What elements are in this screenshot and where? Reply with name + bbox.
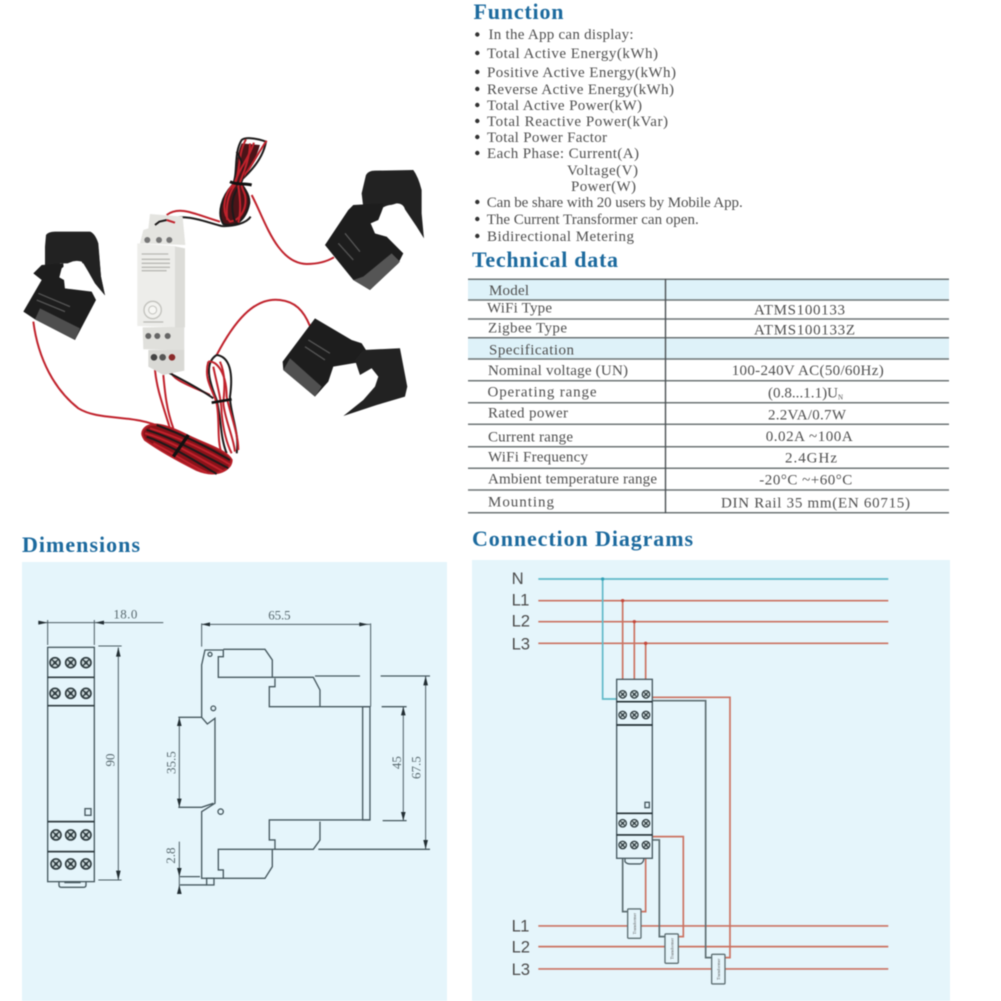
product photo: meter with three current transformers (23, 138, 424, 474)
heading: Technical data: Technical data (472, 247, 618, 272)
current transformer 1: Transformer (632, 912, 637, 934)
current transformer 2 (665, 934, 678, 963)
technical data table: Zigbee Type (488, 321, 567, 337)
technical data table: WiFi Frequency (488, 450, 588, 466)
technical data table: (0.8...1.1)U (768, 386, 838, 402)
line labels: L2 (512, 612, 530, 631)
technical data table: Ambient temperature range (488, 471, 657, 487)
dimension label: 90: 90 (102, 753, 117, 766)
function bullet list: Total Power Factor (487, 130, 607, 146)
current transformer 3 (712, 954, 725, 984)
wire: left current transformer lead (33, 322, 163, 428)
dimension label: 18.0: 18.0 (113, 607, 137, 622)
technical data table: 100-240V AC(50/60Hz) (732, 363, 884, 379)
technical data table: Operating range (488, 385, 597, 401)
current transformer 1 (628, 909, 641, 938)
panel: connection diagrams (472, 560, 950, 1001)
left current transformer (23, 232, 105, 340)
dimension label: 2.8: 2.8 (163, 848, 178, 864)
current transformer 2: Transformer (669, 937, 674, 959)
technical data table (468, 279, 949, 513)
technical data table: Model (489, 283, 529, 299)
function bullet list: Bidirectional Metering (487, 229, 634, 245)
current transformer 3: Transformer (716, 958, 721, 980)
current transformer wires (623, 697, 730, 958)
function bullet list: The Current Transformer can open. (487, 212, 699, 228)
technical data table: WiFi Type (487, 301, 552, 317)
line labels: L1 (512, 591, 529, 610)
function bullet list: Total Active Energy(kWh) (487, 46, 658, 62)
meter body (137, 214, 185, 375)
heading: Dimensions: Dimensions (22, 532, 140, 557)
technical data table: ATMS100133 (754, 302, 845, 318)
line labels: N (512, 569, 524, 588)
technical data table: 2.4GHz (785, 451, 837, 467)
function bullet list: Total Reactive Power(kVar) (487, 114, 668, 130)
technical data table: ATMS100133Z (754, 322, 855, 338)
function bullet list (475, 27, 743, 245)
side profile of module (178, 649, 430, 885)
line labels: L1 (512, 917, 529, 936)
line labels: L3 (512, 634, 530, 653)
line labels: L3 (512, 960, 530, 979)
dimension label: 65.5: 65.5 (268, 607, 291, 622)
supply wires into meter (601, 577, 647, 699)
function bullet list: Total Active Power(kW) (487, 98, 642, 114)
dimension drawings (38, 607, 430, 894)
technical data table: 0.02A ~100A (766, 429, 853, 445)
heading: Connection Diagrams: Connection Diagrams (472, 526, 693, 551)
technical data table: DIN Rail 35 mm(EN 60715) (721, 495, 910, 511)
function bullet list: Positive Active Energy(kWh) (487, 65, 676, 81)
wiring diagram (512, 569, 888, 984)
function bullet list: Voltage(V) (567, 163, 638, 179)
function bullet list: Power(W) (571, 179, 636, 195)
dimension label: 67.5: 67.5 (409, 756, 424, 779)
supply and load bus lines (538, 579, 888, 969)
technical data table: Mounting (488, 495, 554, 511)
wire bundle: top coil (160, 138, 267, 226)
technical data table: -20°C ~+60°C (759, 472, 852, 488)
function bullet list: Reverse Active Energy(kWh) (487, 82, 674, 98)
dimension label: 45: 45 (389, 756, 404, 769)
top right current transformer (325, 170, 424, 290)
dimension label: 35.5: 35.5 (164, 751, 179, 774)
wire bundle: lower coils (142, 355, 238, 474)
wire: right lower current transformer loop (217, 300, 310, 355)
technical data table: Rated power (488, 406, 568, 422)
function bullet list: Can be share with 20 users by Mobile App. (487, 195, 743, 211)
technical data table: Current range (488, 430, 573, 446)
dial (144, 301, 161, 319)
line labels (512, 569, 530, 979)
technical data table: N (838, 394, 843, 402)
function bullet list: Each Phase: Current(A) (487, 146, 639, 162)
technical data table: Specification (489, 342, 574, 358)
meter module (617, 679, 652, 864)
lower right current transformer (283, 318, 407, 416)
technical data table: Nominal voltage (UN) (488, 363, 628, 379)
function bullet list: In the App can display: (488, 27, 634, 43)
front view of module (48, 647, 94, 887)
technical data table: 2.2VA/0.7W (768, 407, 847, 423)
dimension lines and arrows (38, 620, 428, 894)
panel: dimensions (22, 562, 447, 1001)
line labels: L2 (512, 937, 530, 956)
wire: top right current transformer lead (252, 195, 334, 264)
